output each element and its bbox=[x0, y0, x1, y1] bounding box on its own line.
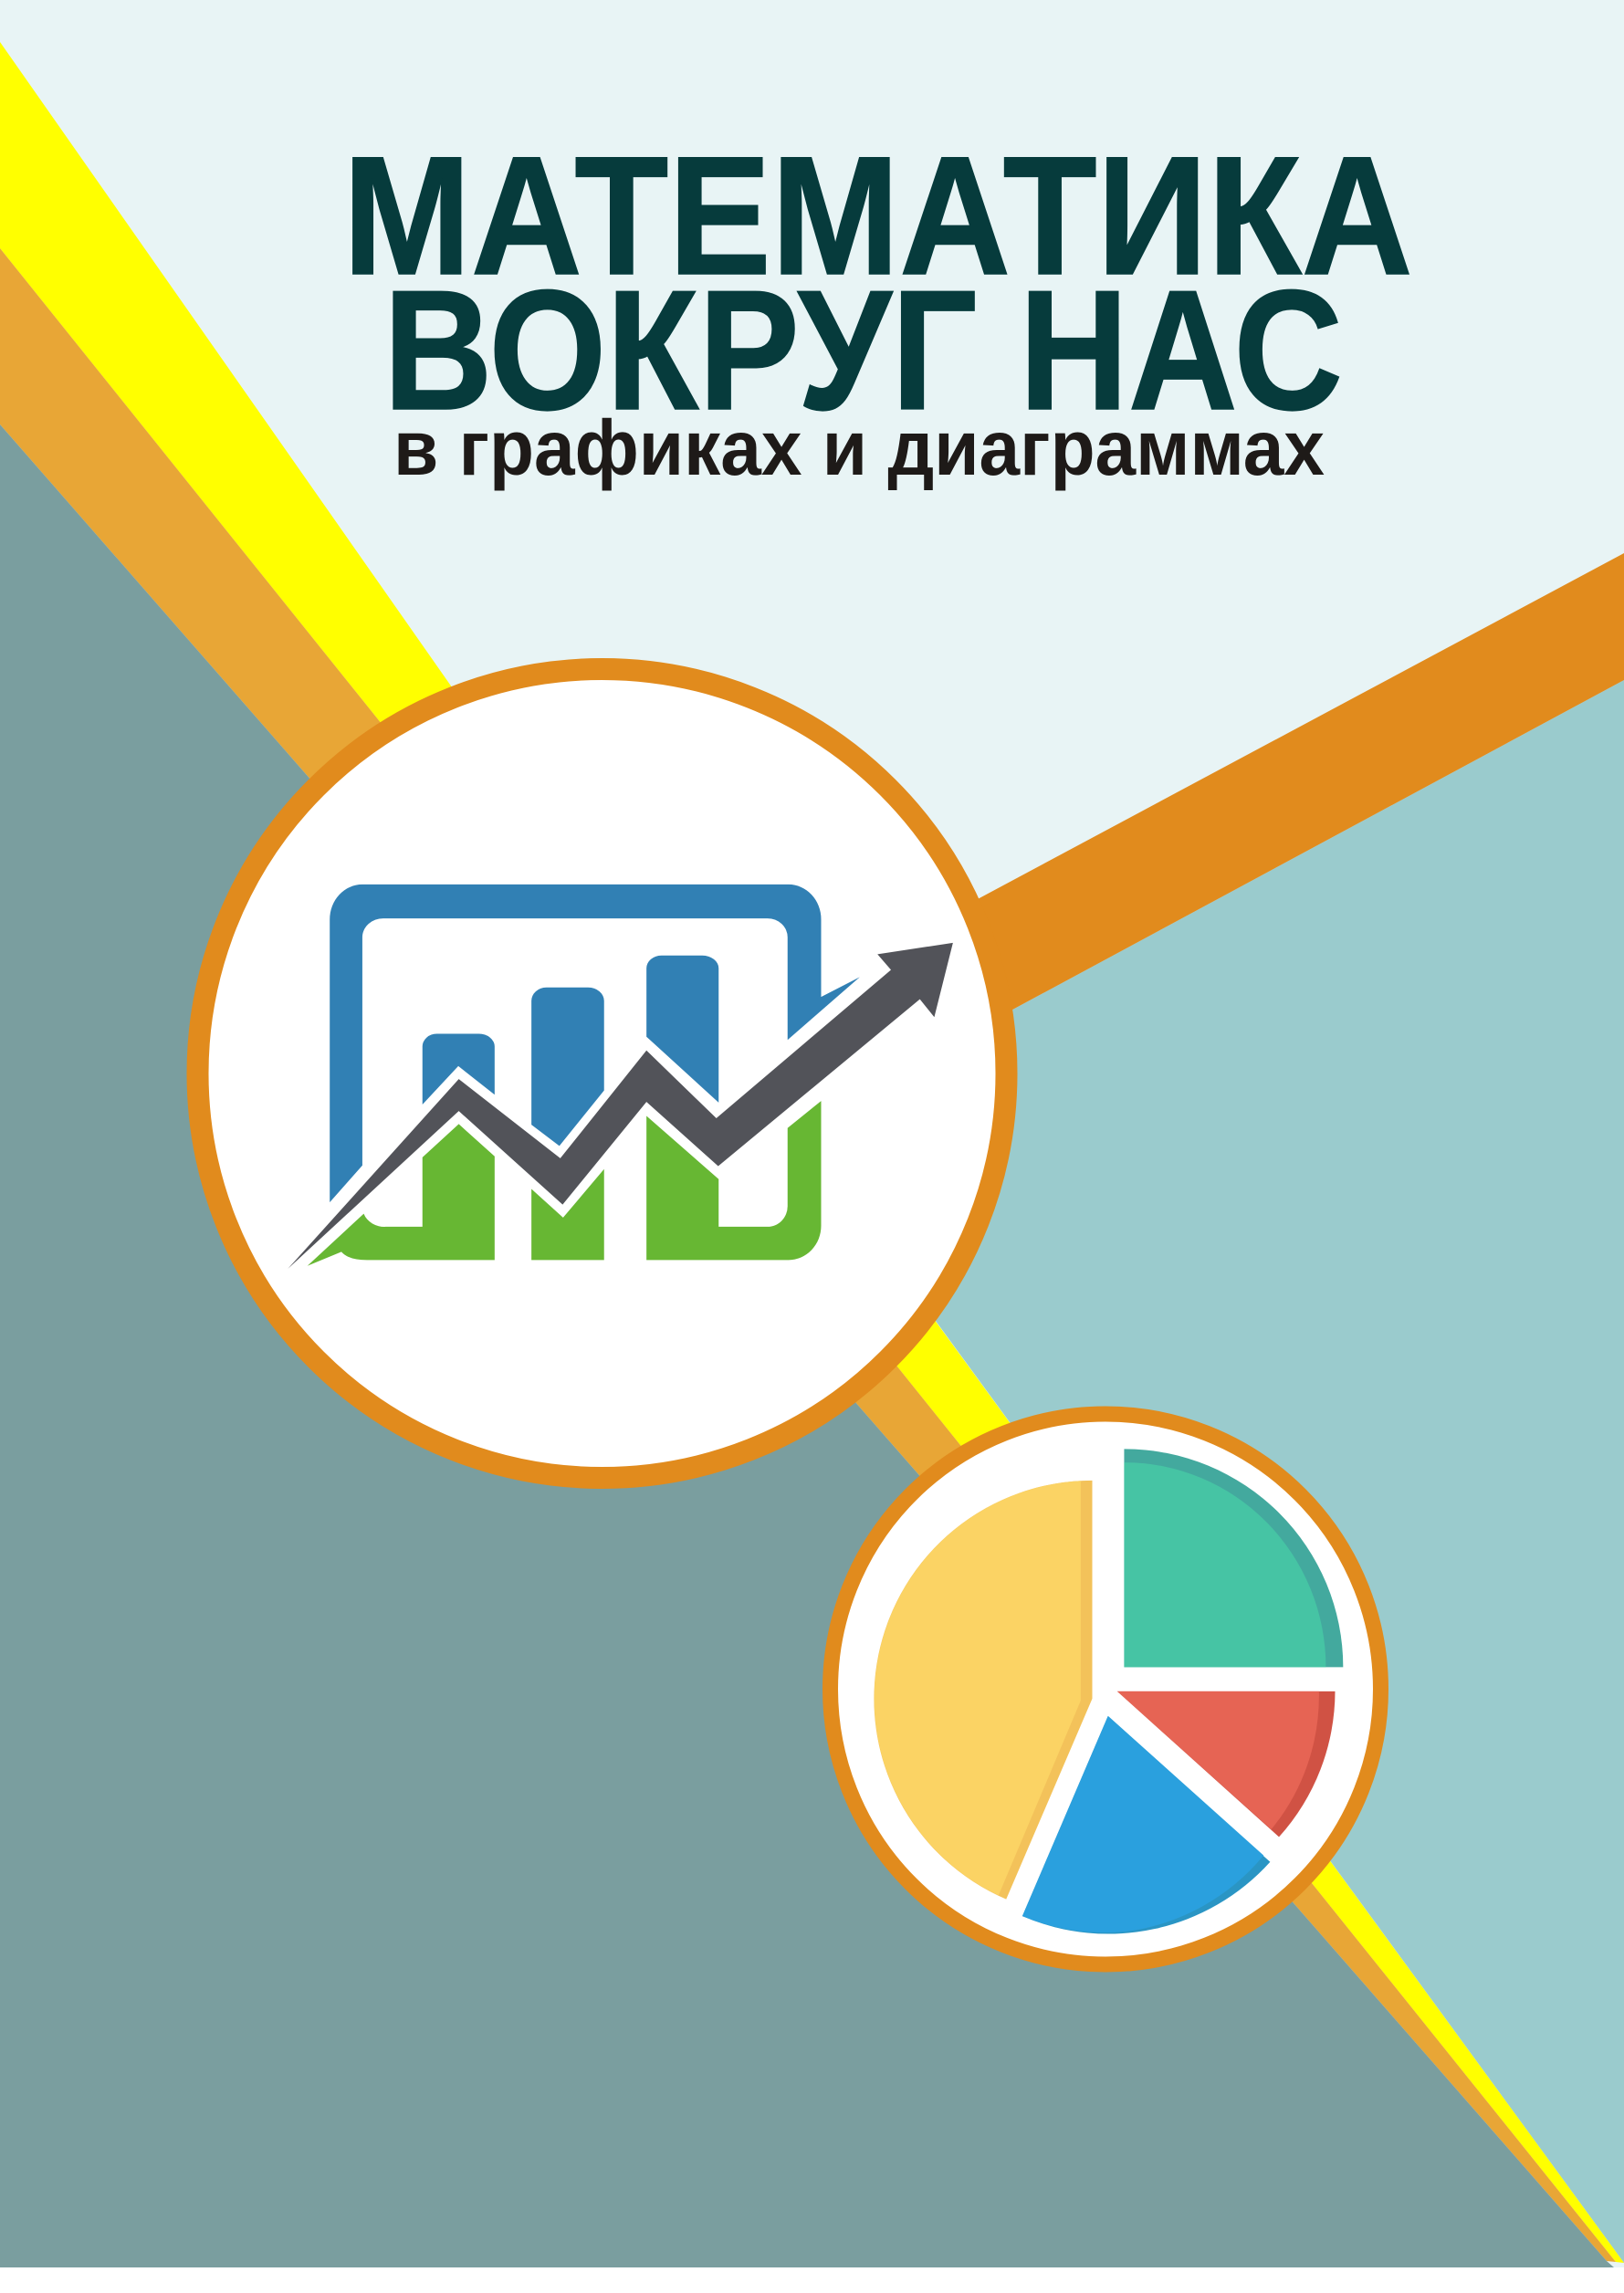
subtitle: в графиках и диаграммах bbox=[393, 405, 1325, 492]
yellow slice bbox=[874, 1481, 1093, 1900]
bars and frame lower part bbox=[308, 1101, 821, 1266]
big circle badge bbox=[197, 669, 1006, 1478]
icon: pie chart bbox=[874, 1449, 1343, 1934]
title line 1: МАТЕМАТИКА bbox=[343, 122, 1413, 310]
title line 2: ВОКРУГ НАС bbox=[383, 255, 1343, 445]
red slice bbox=[1117, 1691, 1335, 1837]
green slice bbox=[1124, 1449, 1343, 1667]
icon: bar chart with rising arrow bbox=[288, 885, 953, 1269]
blue slice bbox=[1022, 1716, 1270, 1934]
chart frame top bbox=[330, 885, 860, 1202]
small circle badge bbox=[831, 1414, 1380, 1964]
bars upper part bbox=[423, 956, 718, 1146]
rising arrow bbox=[288, 943, 953, 1269]
